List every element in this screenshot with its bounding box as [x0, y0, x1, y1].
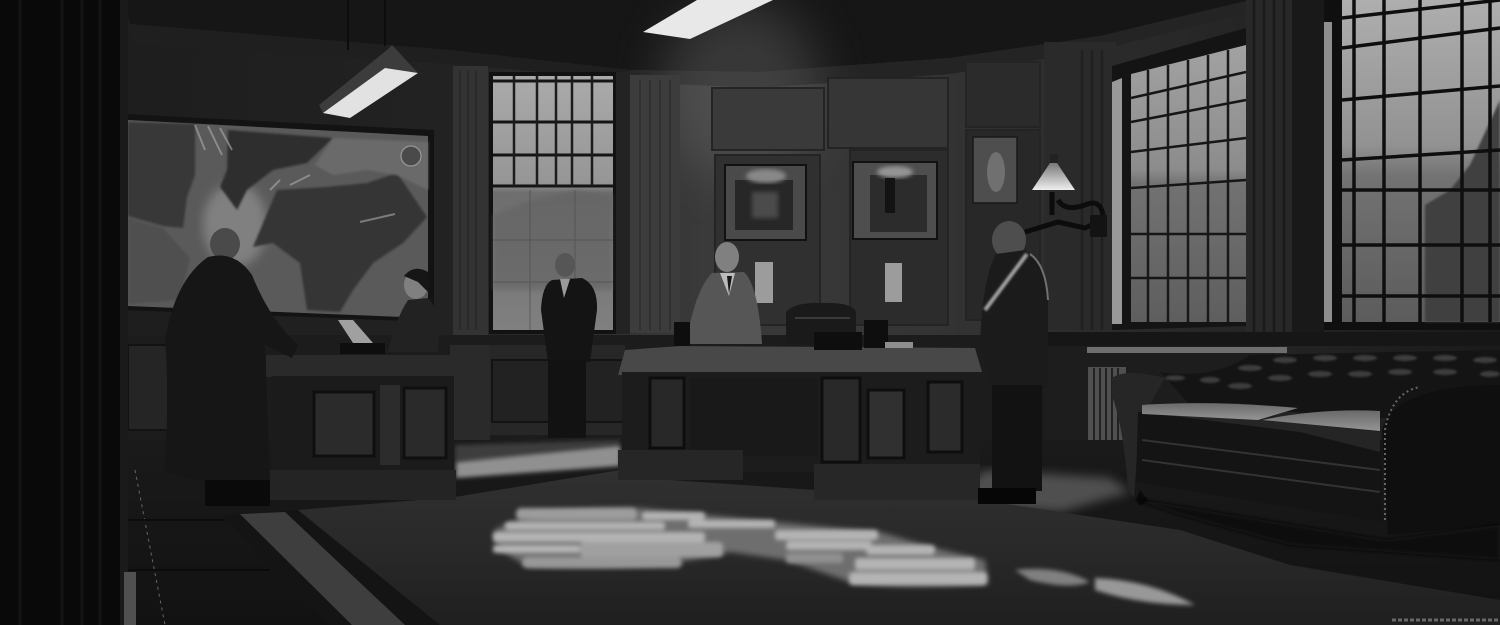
window 1 [489, 72, 616, 334]
map on wall [124, 114, 434, 322]
standing person by window [541, 253, 597, 438]
pilaster left of window 1 [453, 66, 488, 336]
window 3 [1324, 0, 1500, 330]
sofa floor shadow [1130, 498, 1500, 560]
left dark pillar [0, 0, 136, 625]
center wall panels [712, 62, 1040, 325]
picture frame 2 [853, 162, 937, 239]
carpet light patches [493, 508, 1195, 605]
wall lamp [1025, 154, 1107, 237]
chesterfield sofa [1112, 350, 1500, 535]
pilaster near lamp [1044, 42, 1116, 330]
person standing right [978, 221, 1048, 504]
center person in suit [686, 242, 762, 344]
wainscot [125, 332, 1500, 458]
notices on wall [755, 262, 902, 303]
sofa tufting highlights [1165, 355, 1500, 389]
picture frame 1 [725, 165, 806, 240]
ceiling [125, 0, 1250, 88]
leather chair [786, 303, 856, 344]
map: ocean highlights [203, 183, 267, 267]
carpet [298, 470, 1500, 625]
wall and ceiling glow [660, 0, 820, 180]
map: coast details [195, 125, 395, 222]
pilaster right of window 1 [616, 72, 680, 334]
picture frame 3 [973, 137, 1017, 203]
map: continents [128, 122, 428, 312]
floor [125, 440, 1500, 625]
seated person [388, 269, 439, 352]
carpet light patch glow [494, 508, 988, 587]
corner watermark marks [1392, 618, 1498, 622]
person at map in long coat [164, 228, 298, 506]
ceiling light top [643, 0, 773, 39]
main desk [618, 346, 982, 500]
border strip left of carpet [222, 510, 440, 625]
window 2 [1112, 28, 1246, 330]
papers on left desk [338, 320, 385, 354]
desk telephone and items [674, 320, 913, 350]
back wall [0, 0, 1500, 450]
left desk [266, 355, 456, 500]
floor tile lines [135, 470, 165, 625]
floor sheen behind desk [455, 440, 1130, 512]
ceiling light left [319, 0, 418, 118]
pilaster between windows [1246, 0, 1324, 334]
